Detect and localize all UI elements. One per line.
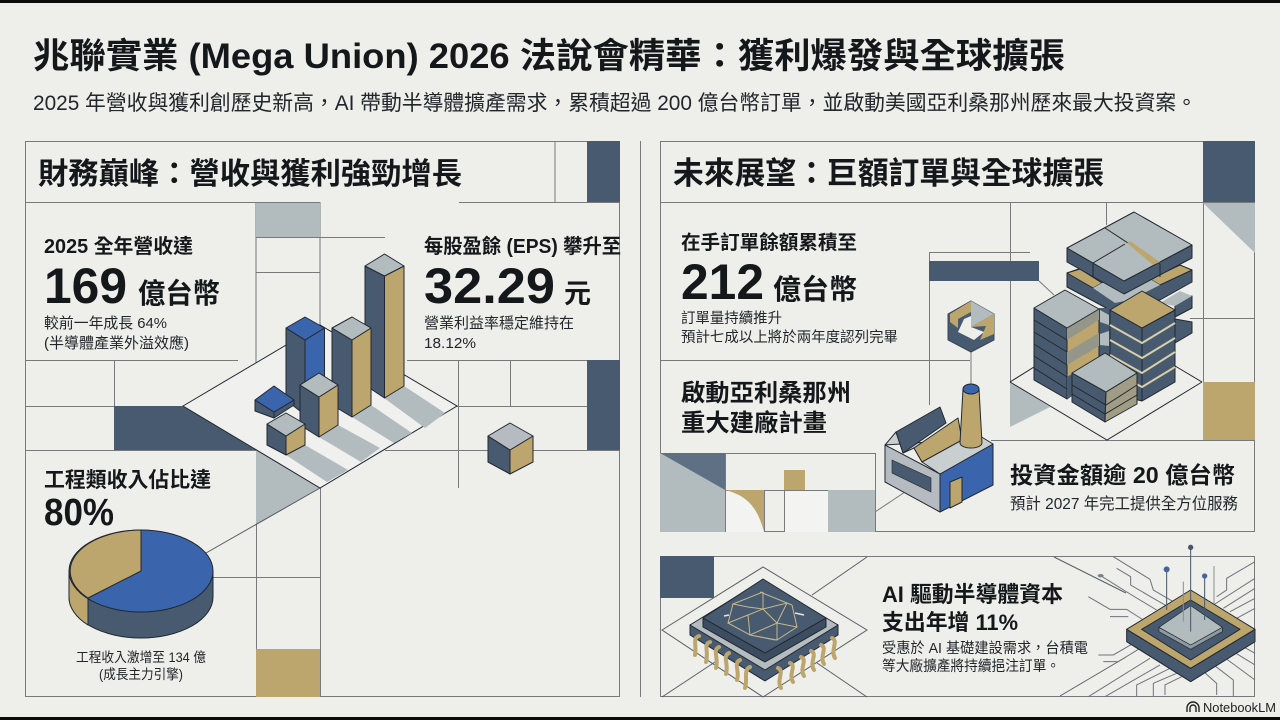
- stat: engineering share: 80%: [44, 492, 114, 534]
- stat: annual revenue: 較前一年成長 64%: [44, 314, 167, 332]
- front stack: [1072, 353, 1137, 422]
- text: AI capex: 受惠於 AI 基礎建設需求，台積電: [882, 640, 1088, 657]
- stat: EPS: [424, 234, 621, 352]
- text: AI capex: 等大廠擴產將持續挹注訂單。: [882, 657, 1060, 675]
- small grey cube: [267, 413, 305, 455]
- back stack layers: [1067, 212, 1192, 343]
- text: AI capex: AI 驅動半導體資本: [882, 582, 1063, 607]
- stat: order backlog: 212: [681, 254, 764, 310]
- stat: annual revenue: 169: [44, 258, 127, 314]
- chip pins: [695, 636, 835, 688]
- 3D pie chart: [69, 530, 213, 638]
- stat: order backlog: [681, 231, 898, 346]
- icon: floating cube: [488, 423, 533, 474]
- gap pieces: [1099, 308, 1111, 370]
- panel: future outlook: [660, 141, 1255, 532]
- stat: order backlog: 億台幣: [773, 273, 857, 305]
- floor diamond: [1010, 357, 1202, 440]
- panel: financial peak: [25, 141, 621, 697]
- chip network lines: [728, 592, 797, 640]
- stat: order backlog: 預計七成以上將於兩年度認列完畢: [681, 329, 898, 346]
- text: AI capex: [882, 582, 1088, 675]
- left stack: [1034, 290, 1099, 399]
- stat: order backlog: 訂單量持續推升: [681, 310, 782, 327]
- stat: investment amount: 投資金額逾 20 億台幣: [1010, 462, 1235, 488]
- blue bar: [286, 317, 324, 415]
- right stack: [1110, 291, 1175, 401]
- text: Arizona plant: 啟動亞利桑那州: [681, 380, 851, 407]
- stat: EPS: 18.12%: [424, 335, 476, 352]
- tall bar: [365, 254, 404, 398]
- pie caption: 工程收入激增至 134 億: [76, 650, 206, 665]
- icon: hexagon: [948, 301, 994, 352]
- stat: engineering share: 工程類收入佔比達: [44, 469, 211, 492]
- stat: investment amount: [1010, 462, 1238, 513]
- stat: engineering share: [44, 469, 211, 534]
- text: Arizona plant: [681, 380, 851, 437]
- pie caption: [76, 650, 206, 682]
- stat: annual revenue: 2025 全年營收達: [44, 235, 193, 258]
- stat: EPS: 元: [564, 279, 591, 309]
- small blue cube: [255, 386, 294, 418]
- middle bar: [332, 317, 371, 417]
- short bar: [300, 373, 338, 437]
- text: Arizona plant: 重大建廠計畫: [681, 409, 827, 437]
- stat: order backlog: 在手訂單餘額累積至: [681, 231, 857, 254]
- stat: EPS: 每股盈餘 (EPS) 攀升至: [424, 234, 621, 258]
- stat: annual revenue: [44, 235, 220, 352]
- text: AI capex: 支出年增 11%: [882, 610, 1018, 635]
- subtitle: 2025 年營收與獲利創歷史新高，AI 帶動半導體擴產需求，累積超過 200 億台幣訂單，並啟動美國亞利桑那州歷來最大投資案。: [33, 92, 1197, 115]
- pie caption: (成長主力引擎): [99, 666, 183, 682]
- stat: EPS: 32.29: [424, 258, 555, 314]
- icon: AI chip: [690, 579, 838, 688]
- stat: EPS: 營業利益率穩定維持在: [424, 315, 574, 332]
- panel: AI capex: [660, 545, 1255, 697]
- illustration: stacked order blocks: [1034, 212, 1192, 422]
- panel heading: 財務巔峰：營收與獲利強勁增長: [38, 158, 462, 191]
- isometric bar chart: [183, 254, 457, 488]
- stat: investment amount: 預計 2027 年完工提供全方位服務: [1010, 495, 1238, 513]
- title: 兆聯實業 (Mega Union) 2026 法說會精華：獲利爆發與全球擴張: [33, 37, 1065, 76]
- stat: annual revenue: 億台幣: [138, 277, 220, 309]
- stat: annual revenue: (半導體產業外溢效應): [44, 334, 189, 352]
- icon: circuit chip with traces: [1088, 545, 1255, 697]
- brand: NotebookLM: NotebookLM: [1203, 700, 1276, 715]
- panel heading: 未來展望：巨額訂單與全球擴張: [673, 156, 1104, 191]
- decorative blocks: navy, grey and gold: [660, 141, 1255, 532]
- decorative blocks: navy, grey and gold: [114, 141, 620, 697]
- icon: factory: [885, 384, 993, 512]
